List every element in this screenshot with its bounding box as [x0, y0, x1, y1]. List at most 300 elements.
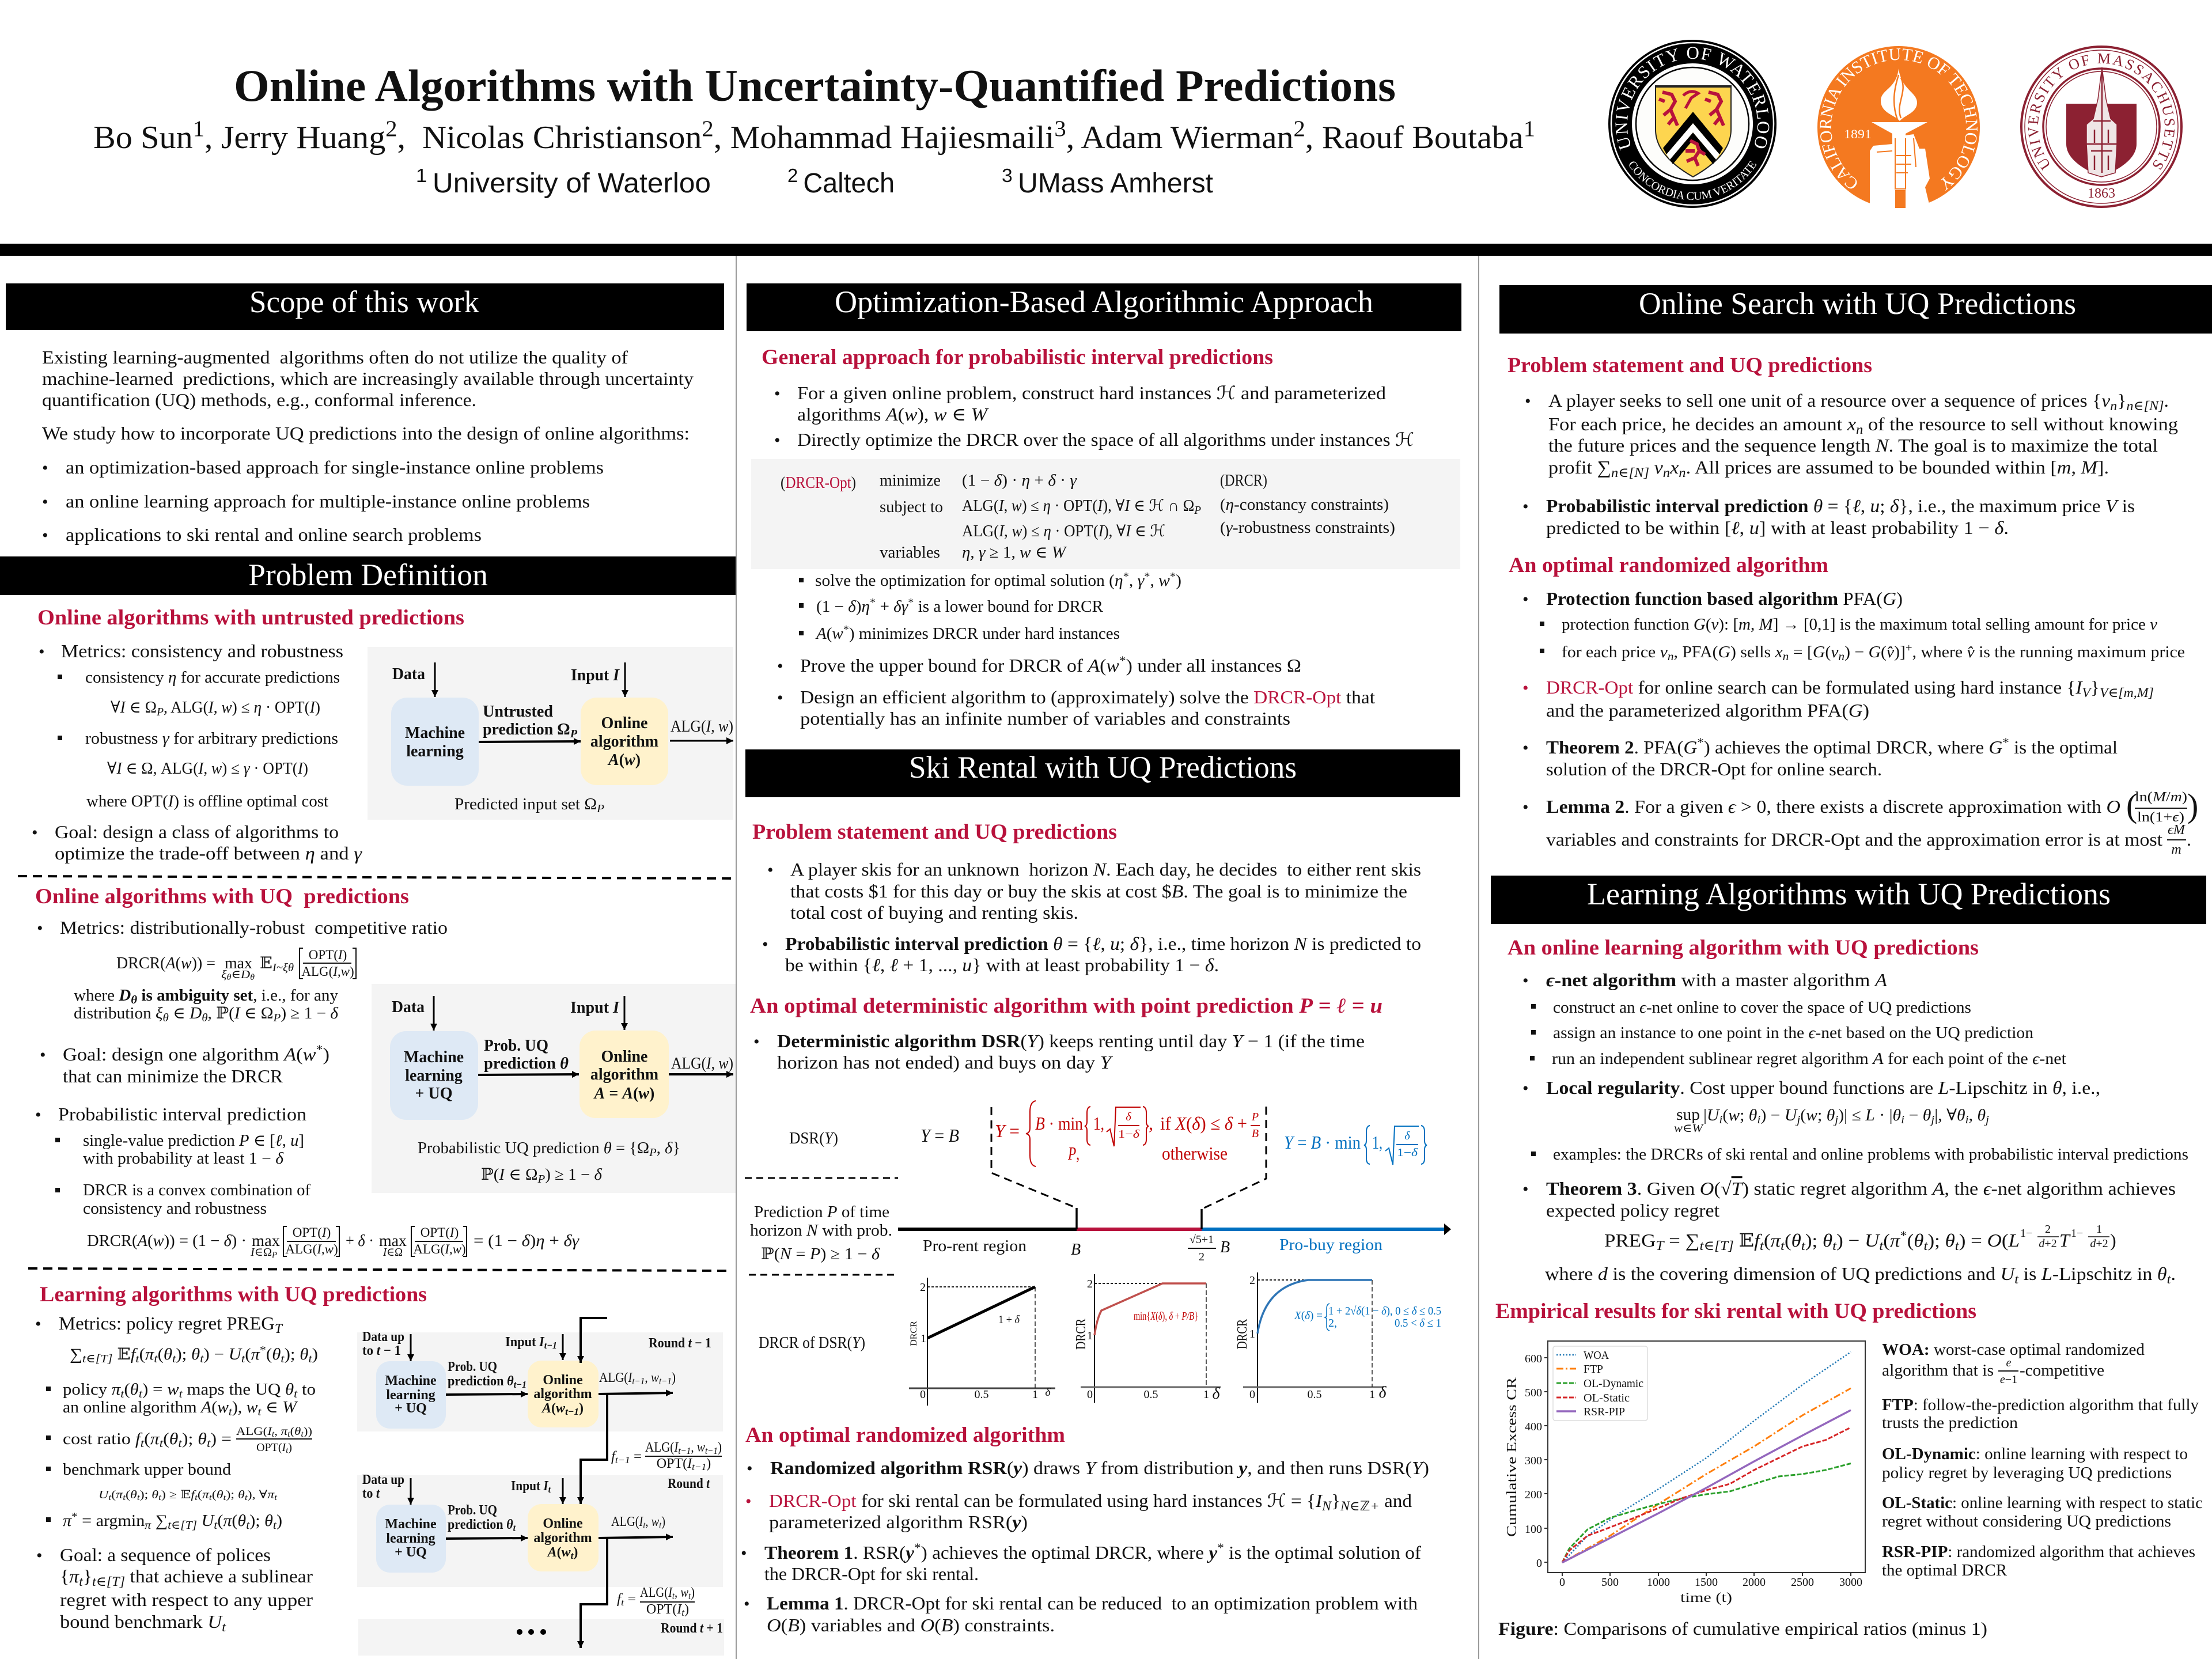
diagram: untrusted predictions: algorithm: [590, 733, 658, 751]
formula: DRCR convex combination: = (1 − δ)η + δγ: [474, 1232, 579, 1250]
text block: goal and probabilistic interval: •: [40, 1046, 46, 1065]
text block: epsilon-net algorithm: run an independent sublinear regret algorithm A for each point of the ϵ-net: [1552, 1050, 2066, 1068]
text block: policy regret: {πt}t∈[T] that achieve a sublinear: [60, 1566, 313, 1589]
logo: University of Waterloo: CONCORDIA CUM VERITATE: [1629, 161, 1757, 200]
diagram: untrusted predictions: Machine: [405, 724, 465, 742]
subheading: deterministic algorithm: An optimal deterministic algorithm with point prediction P = ℓ = u: [750, 994, 1382, 1018]
diagram: UQ predictions: Data: [392, 998, 425, 1016]
formula: policy regret bound: 1: [2096, 1223, 2102, 1236]
text block: PFA algorithm: ln(M/m): [2135, 790, 2187, 805]
logo: UMass Amherst: UNIVERSITY OF MASSACHUSETTS: [2028, 53, 2175, 171]
diagram: UQ predictions: + UQ: [415, 1085, 452, 1103]
text block: search problem: the future prices and the sequence length N. The goal is to maximize the total: [1548, 435, 2158, 456]
y axis ticks and labels: 600: [1525, 1353, 1542, 1365]
text block: ski problem: [762, 859, 1421, 975]
chart legend: OL-Dynamic: [1584, 1377, 1643, 1390]
formula: middle region Y: P: [1251, 1111, 1259, 1123]
text block: solve steps: [777, 570, 1375, 729]
text block: consistency and robustness metrics: Metrics: consistency and robustness: [61, 641, 343, 661]
subheading: UQ predictions: Online algorithms with UQ predictions: [35, 885, 409, 908]
text block: policy regret: Goal: a sequence of polices: [60, 1544, 271, 1565]
bullet list: contributions: an optimization-based approach for single-instance online problems: [66, 457, 604, 478]
bullet list: contributions: an online learning approach for multiple-instance online problems: [66, 491, 590, 512]
row label: prediction: ℙ(N = P) ≥ 1 − δ: [761, 1245, 880, 1263]
panel: DRCR-Opt optimization program: (γ-robustness constraints): [1220, 519, 1395, 537]
text block: algorithm descriptions: algorithm that is: [1882, 1362, 1994, 1380]
text block: DRCR metric: OPT(I): [309, 948, 347, 962]
formula: policy regret bound: T: [2059, 1230, 2071, 1251]
text block: consistency and robustness metrics: •: [39, 642, 45, 661]
text block: epsilon-net algorithm: |Ui(w; θi) − Uj(w; θj)| ≤ L · |θi − θj|, ∀θi, θj: [1703, 1107, 1989, 1126]
formula: policy regret bound: [1604, 1223, 2116, 1253]
logo: University of Waterloo: UNIVERSITY OF WATERLOO: [1615, 47, 1770, 151]
text block: search problem: predicted to be within [ ℓ, u] with at least probability 1 − δ.: [1546, 517, 2009, 538]
formula: DRCR convex combination: OPT(I): [421, 1225, 459, 1240]
heading bar: ski rental: Ski Rental with UQ Predictions: [909, 750, 1297, 785]
diagram: untrusted predictions: Untrusted: [483, 703, 553, 721]
x axis ticks and labels: 2500: [1791, 1576, 1814, 1589]
chart: DRCR pro-rent: 0.5: [975, 1388, 988, 1401]
subheading: empirical results: Empirical results for ski rental with UQ predictions: [1495, 1300, 1976, 1323]
round t panel: learning: [386, 1531, 435, 1546]
arrow: feedback t-1 to t: [581, 1393, 607, 1504]
line chart: cumulative excess CR: [1505, 1341, 1865, 1605]
chart: DRCR pro-rent: δ: [1045, 1386, 1051, 1399]
text block: algorithm descriptions: [1882, 1341, 2203, 1580]
text block: randomized algorithm: the DRCR-Opt for ski rental.: [764, 1563, 979, 1584]
text block: randomized algorithm: •: [744, 1594, 750, 1613]
text block: solve steps: Design an efficient algorithm to (approximately) solve the DRCR-Opt that: [800, 687, 1375, 707]
panel: learning algorithms with UQ predictions (right): [1491, 876, 2206, 1639]
text block: solve steps: solve the optimization for optimal solution ( η*, γ*, w*): [815, 570, 1181, 590]
y axis ticks and labels: [1525, 1353, 1548, 1570]
chart: DRCR middle region: 0: [1087, 1388, 1093, 1401]
chart: DRCR middle region: δ: [1212, 1385, 1220, 1403]
text block: covering dimension note: where d is the covering dimension of UQ predictions and Ut is L-Lipschitz in θt.: [1545, 1263, 2176, 1286]
text block: algorithm descriptions: OL-Dynamic: online learning with respect to: [1882, 1445, 2188, 1463]
text block: epsilon-net algorithm: [1522, 969, 2188, 1221]
text block: epsilon-net algorithm: assign an instance to one point in the ϵ-net based on the UQ prediction: [1553, 1024, 2033, 1042]
formula: DRCR convex combination: ALG(I,w): [285, 1242, 338, 1256]
diagram: UQ predictions: Probabilistic UQ prediction θ = {ΩP, δ}: [418, 1139, 680, 1159]
text block: ski problem: A player skis for an unknown horizon N. Each day, he decides to either rent skis: [790, 859, 1421, 880]
formula: cost ratio t: [617, 1585, 695, 1618]
text block: randomized algorithm: Theorem 1. RSR(y*) achieves the optimal DRCR, where y* is the optimal solution of: [764, 1540, 1421, 1563]
panel: DRCR-Opt optimization program: minimize: [880, 472, 941, 490]
diagram: UQ predictions: [372, 984, 736, 1193]
text block: policy regret: bound benchmark Ut: [60, 1611, 226, 1634]
row label: prediction: horizon N with prob.: [750, 1222, 892, 1240]
text block: epsilon-net algorithm: sup: [1676, 1106, 1700, 1124]
diagram: untrusted predictions: Input I: [571, 666, 620, 684]
panel: online search with UQ predictions: [1499, 285, 2212, 857]
text block: scope intro: quantification (UQ) methods, e.g., conformal inference.: [42, 389, 476, 410]
heading bar: learning algorithms: [1491, 876, 2206, 924]
text block: PFA algorithm: [1522, 588, 2198, 857]
diagram: UQ predictions: Prob. UQ: [484, 1037, 548, 1055]
round t-1 panel: A(wt−1): [541, 1401, 584, 1417]
text block: general approach bullets: [774, 382, 1414, 450]
round t panel: ALG(It, wt): [611, 1514, 665, 1531]
text block: solve steps: •: [777, 688, 783, 707]
y axis title: Cumulative Excess CR: [1505, 1377, 1520, 1537]
text block: goal and probabilistic interval: single-value prediction P ∈ [ℓ, u]: [83, 1132, 304, 1150]
chart: DRCR middle region: 0.5: [1144, 1388, 1158, 1401]
diagram: untrusted predictions: Data: [392, 665, 425, 683]
panel: DRCR-Opt optimization program: variables: [880, 544, 940, 562]
round t panel: Input It: [511, 1479, 551, 1495]
text block: scope intro: We study how to incorporate UQ predictions into the design of online algorithms:: [42, 423, 690, 444]
text block: randomized algorithm: •: [745, 1492, 752, 1511]
subheading: randomized algorithm: An optimal randomized algorithm: [745, 1423, 1065, 1447]
round t panel: Round t: [668, 1476, 710, 1491]
series: RSR-PIP: [1562, 1410, 1851, 1563]
panel: optimization-based algorithmic approach: [747, 283, 1461, 729]
formula: cost ratio t-1: ft−1 =: [611, 1449, 642, 1465]
text block: randomized algorithm: DRCR-Opt for ski rental can be formulated using hard instances ℋ = {IN}N∈ℤ+ and: [769, 1490, 1412, 1513]
formula: DRCR convex combination: max: [379, 1232, 407, 1250]
round t-1 panel: Data up: [362, 1330, 404, 1344]
diagram: untrusted predictions: [368, 647, 733, 820]
timeline axis: [898, 1208, 1451, 1235]
text block: DRCR metric: max: [225, 955, 252, 972]
chart: DRCR pro-buy: 2: [1249, 1274, 1255, 1287]
round t panel: + UQ: [395, 1545, 427, 1560]
diagram: untrusted predictions: prediction ΩP: [483, 721, 578, 740]
text block: PFA algorithm: ln(1+ ϵ): [2137, 810, 2184, 825]
round t-1 panel: Input It−1: [505, 1335, 557, 1351]
affiliations: [416, 165, 1213, 199]
text block: randomized algorithm: •: [747, 1459, 753, 1478]
series: FTP: [1562, 1388, 1851, 1563]
heading bar: ski rental: [745, 749, 1460, 797]
bullet list: contributions: •: [42, 526, 48, 545]
chart: DRCR pro-rent: 1 + δ: [998, 1313, 1020, 1326]
heading bar: scope: [6, 283, 724, 330]
text block: DRCR metric: DRCR(A(w)) =: [116, 955, 215, 972]
formula: cost ratio t-1: [611, 1440, 722, 1472]
text block: consistency and robustness metrics: ∀I ∈ Ω, ALG(I, w) ≤ γ · OPT(I): [107, 760, 308, 778]
chart: DRCR pro-buy: 0.5: [1308, 1388, 1321, 1401]
text block: ski problem: total cost of buying and renting skis.: [790, 902, 1078, 923]
x axis ticks and labels: 2000: [1743, 1576, 1766, 1589]
y axis ticks and labels: 100: [1525, 1523, 1542, 1536]
heading bar: learning algorithms: Learning Algorithms with UQ Predictions: [1587, 877, 2111, 911]
formula: pro-buy Y: 1−δ: [1397, 1146, 1418, 1159]
poster title: Online Algorithms with Uncertainty-Quantified Predictions: [234, 60, 1396, 111]
text block: algorithm descriptions: the optimal DRCR: [1882, 1562, 2007, 1580]
x axis ticks and labels: 3000: [1839, 1576, 1862, 1589]
chart: DRCR pro-buy: 2,: [1328, 1317, 1337, 1330]
text block: PFA algorithm: variables and constraints for DRCR-Opt and the approximation error is at most: [1546, 829, 2162, 850]
text block: PFA algorithm: DRCR-Opt for online search can be formulated using hard instance { IV}V∈[m,M]: [1546, 677, 2154, 700]
text block: DRCR metric: ξθ∈Dθ: [221, 968, 255, 982]
chart legend: [1553, 1346, 1647, 1421]
text block: algorithm descriptions: OL-Static: online learning with respect to static: [1882, 1494, 2203, 1512]
x axis ticks and labels: 0: [1559, 1576, 1565, 1589]
affiliations: 2 Caltech: [787, 165, 895, 199]
bullet list: contributions: •: [42, 493, 48, 512]
text block: PFA algorithm: protection function G(v): [m, M] → [0,1] is the maximum total selling amount for price v: [1562, 616, 2158, 634]
text block: policy regret: OPT(It): [256, 1441, 292, 1455]
formula: middle region Y: ,: [1149, 1113, 1153, 1134]
formula: policy regret bound: PREG T = ∑t∈[T] 𝔼ft(πt(θt); θt) − Ut(π*(θt); θt) = O(L: [1604, 1228, 2020, 1253]
text block: epsilon-net algorithm: •: [1522, 1180, 1529, 1199]
text block: PFA algorithm: Lemma 2. For a given ϵ > 0, there exists a discrete approximation with O: [1546, 796, 2120, 817]
text block: ski problem: Probabilistic interval prediction θ = {ℓ, u; δ}, i.e., time horizon N is predicted to: [785, 933, 1421, 954]
panel: learning algorithms with UQ predictions: [35, 1283, 724, 1656]
text block: ski problem: that costs $1 for this day or buy the skis at cost $ B. The goal is to minimize the: [790, 881, 1407, 902]
text block: consistency and robustness metrics: optimize the trade-off between η and γ: [55, 843, 363, 863]
text block: general approach bullets: Directly optimize the DRCR over the space of all algorithms under instances ℋ: [797, 429, 1414, 450]
text block: ski problem: be within {ℓ, ℓ + 1, ..., u} with at least probability 1 − δ.: [785, 955, 1219, 975]
text block: PFA algorithm: solution of the DRCR-Opt for online search.: [1546, 759, 1882, 779]
text block: randomized algorithm: O(B) variables and O(B) constraints.: [767, 1615, 1055, 1635]
heading bar: online search: [1499, 285, 2212, 334]
text block: goal and probabilistic interval: Probabilistic interval prediction: [58, 1104, 306, 1124]
y axis ticks and labels: 0: [1536, 1557, 1542, 1570]
series: WOA: [1562, 1352, 1851, 1563]
text block: epsilon-net algorithm: w∈W: [1674, 1122, 1705, 1135]
diagram: UQ predictions: Machine: [404, 1048, 464, 1066]
text block: PFA algorithm: m: [2171, 842, 2181, 857]
text block: deterministic algorithm: Deterministic algorithm DSR (Y) keeps renting until day Y − 1 (if the time: [777, 1031, 1365, 1051]
round t-1 panel: Round t − 1: [649, 1336, 711, 1351]
formula: middle region Y: B: [1252, 1127, 1259, 1140]
row label: DSR: DSR(Y): [789, 1130, 838, 1147]
text block: deterministic algorithm: [753, 1031, 1365, 1073]
text block: consistency and robustness metrics: robustness γ for arbitrary predictions: [85, 730, 338, 748]
formula: DRCR convex combination: DRCR(A(w)) = (1 − δ) ·: [87, 1232, 247, 1250]
text block: DRCR metric: •: [37, 919, 43, 938]
heading bar: optimization approach: [747, 283, 1461, 331]
diagram: online learning rounds: [357, 1318, 724, 1656]
round t+1 panel: Round t + 1: [661, 1621, 723, 1636]
text block: epsilon-net algorithm: ϵ-net algorithm with a master algorithm A: [1546, 969, 1887, 990]
chart: DRCR middle region: [1074, 1274, 1221, 1403]
chart: DRCR pro-buy: 0: [1249, 1388, 1255, 1401]
heading bar: problem definition: [0, 556, 736, 595]
text block: goal and probabilistic interval: that can minimize the DRCR: [63, 1066, 283, 1086]
series: OL-Dynamic: [1562, 1463, 1851, 1563]
panel: DRCR-Opt optimization program: ALG(I, w) ≤ η · OPT(I), ∀I ∈ ℋ ∩ ΩP: [962, 497, 1201, 517]
text block: algorithm descriptions: RSR-PIP: randomized algorithm that achieves: [1882, 1543, 2195, 1561]
diagram: untrusted predictions: Predicted input set Ω P: [454, 796, 604, 815]
text block: search problem: Probabilistic interval prediction θ = {ℓ, u; δ}, i.e., the maximum price V is: [1546, 495, 2135, 516]
bullet list: contributions: applications to ski rental and online search problems: [66, 524, 482, 545]
subheading: ski problem statement: Problem statement and UQ predictions: [752, 820, 1117, 844]
timeline labels: B: [1220, 1238, 1230, 1256]
text block: algorithm descriptions: regret without considering UQ predictions: [1882, 1513, 2171, 1531]
text block: search problem: •: [1522, 497, 1529, 516]
logo: Caltech: CALIFORNIA INSTITUTE OF TECHNOLOGY: [1820, 48, 1978, 191]
panel: DRCR-Opt optimization program: subject to: [880, 498, 943, 516]
text block: PFA algorithm: •: [1522, 590, 1529, 609]
diagram: UQ predictions: ALG(I, w): [671, 1055, 733, 1073]
formula: cost ratio t: ALG(It, wt): [640, 1585, 695, 1601]
timeline labels: Pro-buy region: [1279, 1236, 1382, 1254]
x axis ticks and labels: [1559, 1573, 1862, 1589]
round t panel: Machine: [385, 1517, 437, 1532]
bullet list: contributions: •: [42, 459, 48, 478]
arrow: feedback t to t+1: [581, 1537, 607, 1648]
round t-1 panel: + UQ: [395, 1401, 427, 1416]
text block: algorithm descriptions: FTP: follow-the-prediction algorithm that fully: [1882, 1396, 2199, 1414]
panel: ski rental with UQ predictions: [741, 749, 1460, 1635]
chart: DRCR middle region: 2: [1087, 1278, 1093, 1290]
text block: goal and probabilistic interval: with probability at least 1 − δ: [83, 1150, 284, 1168]
formula: pro-buy Y: 1,: [1372, 1132, 1382, 1153]
text block: policy regret: ALG( It, πt(θt)): [236, 1425, 312, 1439]
formula: policy regret bound: 1−: [2020, 1227, 2032, 1240]
round t panel: Online: [543, 1516, 583, 1531]
formula: middle region Y: B · min: [1035, 1113, 1083, 1134]
round t-1 panel: learning: [386, 1388, 435, 1403]
text block: DRCR metric: where Dθ is ambiguity set , i.e., for any: [74, 987, 338, 1006]
formula: middle region Y: otherwise: [1162, 1143, 1228, 1164]
round t-1 panel: Prob. UQ: [448, 1359, 497, 1374]
heading bar: optimization approach: Optimization-Based Algorithmic Approach: [835, 285, 1373, 319]
formula: DRCR convex combination: + δ ·: [346, 1232, 374, 1250]
text block: epsilon-net algorithm: examples: the DRCRs of ski rental and online problems with probabilistic interval predictions: [1553, 1146, 2188, 1164]
text block: policy regret: •: [36, 1546, 43, 1565]
round t panel: algorithm: [533, 1531, 592, 1546]
row label: DRCR of DSR: DRCR of DSR(Y): [759, 1334, 865, 1352]
chart: DRCR pro-rent: 1: [1032, 1388, 1038, 1401]
diagram: UQ predictions: prediction θ: [484, 1055, 569, 1073]
formula: DRCR convex combination: I∈Ω: [382, 1246, 403, 1259]
subheading: online learning algorithm: An online learning algorithm with UQ predictions: [1508, 936, 1979, 960]
text block: randomized algorithm: Randomized algorithm RSR (y) draws Y from distribution y, and then runs DSR( Y): [770, 1457, 1429, 1478]
text block: search problem: For each price, he decides an amount xn of the resource to sell without knowing: [1548, 414, 2178, 437]
chart legend: FTP: [1584, 1363, 1603, 1376]
column divider right: [1478, 256, 1479, 1659]
text block: consistency and robustness metrics: •: [32, 823, 38, 842]
x axis ticks and labels: 1500: [1695, 1576, 1718, 1589]
round t panel: Data up: [362, 1472, 404, 1487]
text block: PFA algorithm: and the parameterized algorithm PFA( G): [1546, 700, 1869, 721]
text block: epsilon-net algorithm: construct an ϵ-net online to cover the space of UQ predictions: [1553, 999, 1971, 1017]
text block: DRCR metric: distribution ξθ ∈ Dθ, ℙ(I ∈ ΩP) ≥ 1 − δ: [74, 1005, 339, 1024]
text block: PFA algorithm: Protection function based algorithm PFA(G): [1546, 588, 1903, 609]
text block: goal and probabilistic interval: DRCR is a convex combination of: [83, 1181, 311, 1199]
timeline labels: √5+1: [1190, 1233, 1214, 1246]
text block: consistency and robustness metrics: [32, 641, 363, 863]
formula: middle region Y: 1,: [1093, 1113, 1104, 1134]
diagram: untrusted predictions: ALG(I, w): [671, 718, 733, 736]
y axis ticks and labels: 400: [1525, 1421, 1542, 1433]
round t+1 panel: [358, 1619, 724, 1656]
text block: epsilon-net algorithm: Theorem 3 . Given O(√T) static regret algorithm A, the ϵ-net algorithm achieves: [1546, 1178, 2176, 1199]
text block: consistency and robustness metrics: where OPT(I) is offline optimal cost: [86, 793, 328, 810]
text block: randomized algorithm: Lemma 1. DRCR-Opt for ski rental can be reduced to an optimization problem with: [767, 1593, 1418, 1613]
formula: DRCR convex combination: max: [252, 1232, 280, 1250]
text block: epsilon-net algorithm: Local regularity . Cost upper bound functions are L-Lipschitz in θ, i.e.,: [1546, 1077, 2100, 1098]
text block: PFA algorithm: ): [2187, 787, 2198, 824]
text block: algorithm descriptions: -competitive: [2020, 1362, 2104, 1380]
logo: UMass Amherst: 1863: [2088, 186, 2115, 201]
text block: solve steps: •: [777, 657, 783, 676]
chart legend: RSR-PIP: [1584, 1406, 1625, 1418]
subheading: search randomized algorithm: An optimal randomized algorithm: [1509, 554, 1828, 577]
x axis ticks and labels: 1000: [1647, 1576, 1670, 1589]
diagram: untrusted predictions: learning: [406, 743, 464, 760]
round t-1 panel: Online: [543, 1373, 583, 1388]
heading bar: problem definition: Problem Definition: [248, 558, 488, 592]
divider: dashed 2: [28, 1268, 727, 1271]
row label: prediction: [750, 1203, 892, 1263]
text block: PFA algorithm: •: [1522, 738, 1529, 757]
text block: policy regret: ∑t∈[T] 𝔼ft(πt(θt); θt) − Ut(π*(θt); θt): [70, 1344, 318, 1365]
diagram: UQ predictions: learning: [405, 1067, 463, 1085]
panel: problem definition: [0, 556, 736, 863]
text block: DRCR metric: 𝔼I~ξθ: [260, 955, 294, 974]
formula: DRCR convex combination: OPT(I): [293, 1225, 331, 1240]
text block: goal and probabilistic interval: [35, 1041, 329, 1218]
timeline labels: 2: [1199, 1251, 1205, 1263]
text block: goal and probabilistic interval: Goal: design one algorithm A(w*): [63, 1041, 329, 1065]
affiliations: 3 UMass Amherst: [1002, 165, 1213, 199]
text block: consistency and robustness metrics: Goal: design a class of algorithms to: [55, 821, 339, 842]
formula: middle region Y: if X(δ) ≤ δ +: [1160, 1113, 1247, 1134]
text block: policy regret: •: [35, 1315, 41, 1334]
formula: cost ratio t-1: ALG(It−1, wt−1): [645, 1440, 722, 1456]
subheading: general approach: General approach for probabilistic interval predictions: [762, 346, 1273, 369]
text block: policy regret: regret with respect to any upper: [60, 1589, 313, 1610]
diagram: untrusted predictions: Online: [601, 714, 647, 732]
text block: DRCR metric: Metrics: distributionally-robust competitive ratio: [60, 917, 448, 938]
text block: solve steps: Prove the upper bound for DRCR of A(w*) under all instances Ω: [800, 653, 1301, 676]
chart: DRCR pro-buy: 1 + 2√δ(1 − δ), 0 ≤ δ ≤ 0.5: [1328, 1305, 1441, 1317]
heading bar: online search: Online Search with UQ Predictions: [1639, 286, 2076, 321]
panel: DRCR-Opt optimization program: ALG(I, w) ≤ η · OPT(I), ∀I ∈ ℋ: [962, 522, 1165, 540]
timeline labels: Pro-rent region: [923, 1237, 1027, 1255]
formula: middle region Y: 1−δ: [1118, 1128, 1140, 1141]
formula: policy regret bound: ): [2110, 1230, 2116, 1251]
text block: search problem: A player seeks to sell one unit of a resource over a sequence of prices { vn}n∈[N].: [1548, 390, 2169, 413]
text block: DRCR metric: [37, 917, 448, 1024]
chart legend: WOA: [1584, 1349, 1609, 1362]
text block: consistency and robustness metrics: ∀I ∈ ΩP, ALG(I, w) ≤ η · OPT(I): [111, 699, 320, 718]
round t panel: Prob. UQ: [448, 1503, 497, 1518]
x axis title: time (t): [1680, 1590, 1732, 1605]
chart legend: OL-Static: [1584, 1392, 1630, 1404]
figure caption: Figure: Comparisons of cumulative empirical ratios (minus 1): [1498, 1618, 1987, 1639]
formula: pro-rent Y: Y = B: [921, 1125, 959, 1146]
text block: algorithm descriptions: WOA: worst-case optimal randomized: [1882, 1341, 2145, 1359]
text block: policy regret: [35, 1313, 318, 1634]
round t-1 panel: algorithm: [533, 1387, 592, 1402]
text block: policy regret: cost ratio ft(πt(θt); θt) =: [63, 1430, 232, 1450]
diagram: UQ predictions: A = A(w): [593, 1085, 654, 1103]
panel: DRCR-Opt optimization program: (DRCR): [1220, 472, 1267, 490]
chart: DRCR pro-buy: [1235, 1272, 1441, 1403]
chart: DRCR middle region: min{X(δ), δ + P/B}: [1134, 1310, 1198, 1323]
affiliations: 1 University of Waterloo: [416, 165, 711, 199]
text block: scope intro: machine-learned predictions, which are increasingly available through uncertainty: [42, 368, 694, 389]
row label: prediction: Prediction P of time: [754, 1203, 889, 1221]
diagram: UQ predictions: algorithm: [590, 1066, 658, 1084]
text block: general approach bullets: algorithms A(w), w ∈ W: [797, 404, 990, 425]
authors: Bo Sun1, Jerry Huang 2, Nicolas Christianson 2, Mohammad Hajiesmaili 3, Adam Wierman 2, Raouf Boutaba 1: [93, 116, 1535, 156]
column divider left: [736, 256, 737, 1659]
formula: middle region Y: Y =: [995, 1120, 1020, 1141]
text block: DRCR metric: ALG(I,w): [301, 964, 354, 979]
y axis ticks and labels: 500: [1525, 1387, 1542, 1399]
chart: DRCR pro-buy: 1: [1369, 1388, 1375, 1401]
text block: algorithm descriptions: trusts the prediction: [1882, 1414, 2018, 1432]
chart: DRCR pro-buy: X(δ) =: [1294, 1309, 1323, 1322]
